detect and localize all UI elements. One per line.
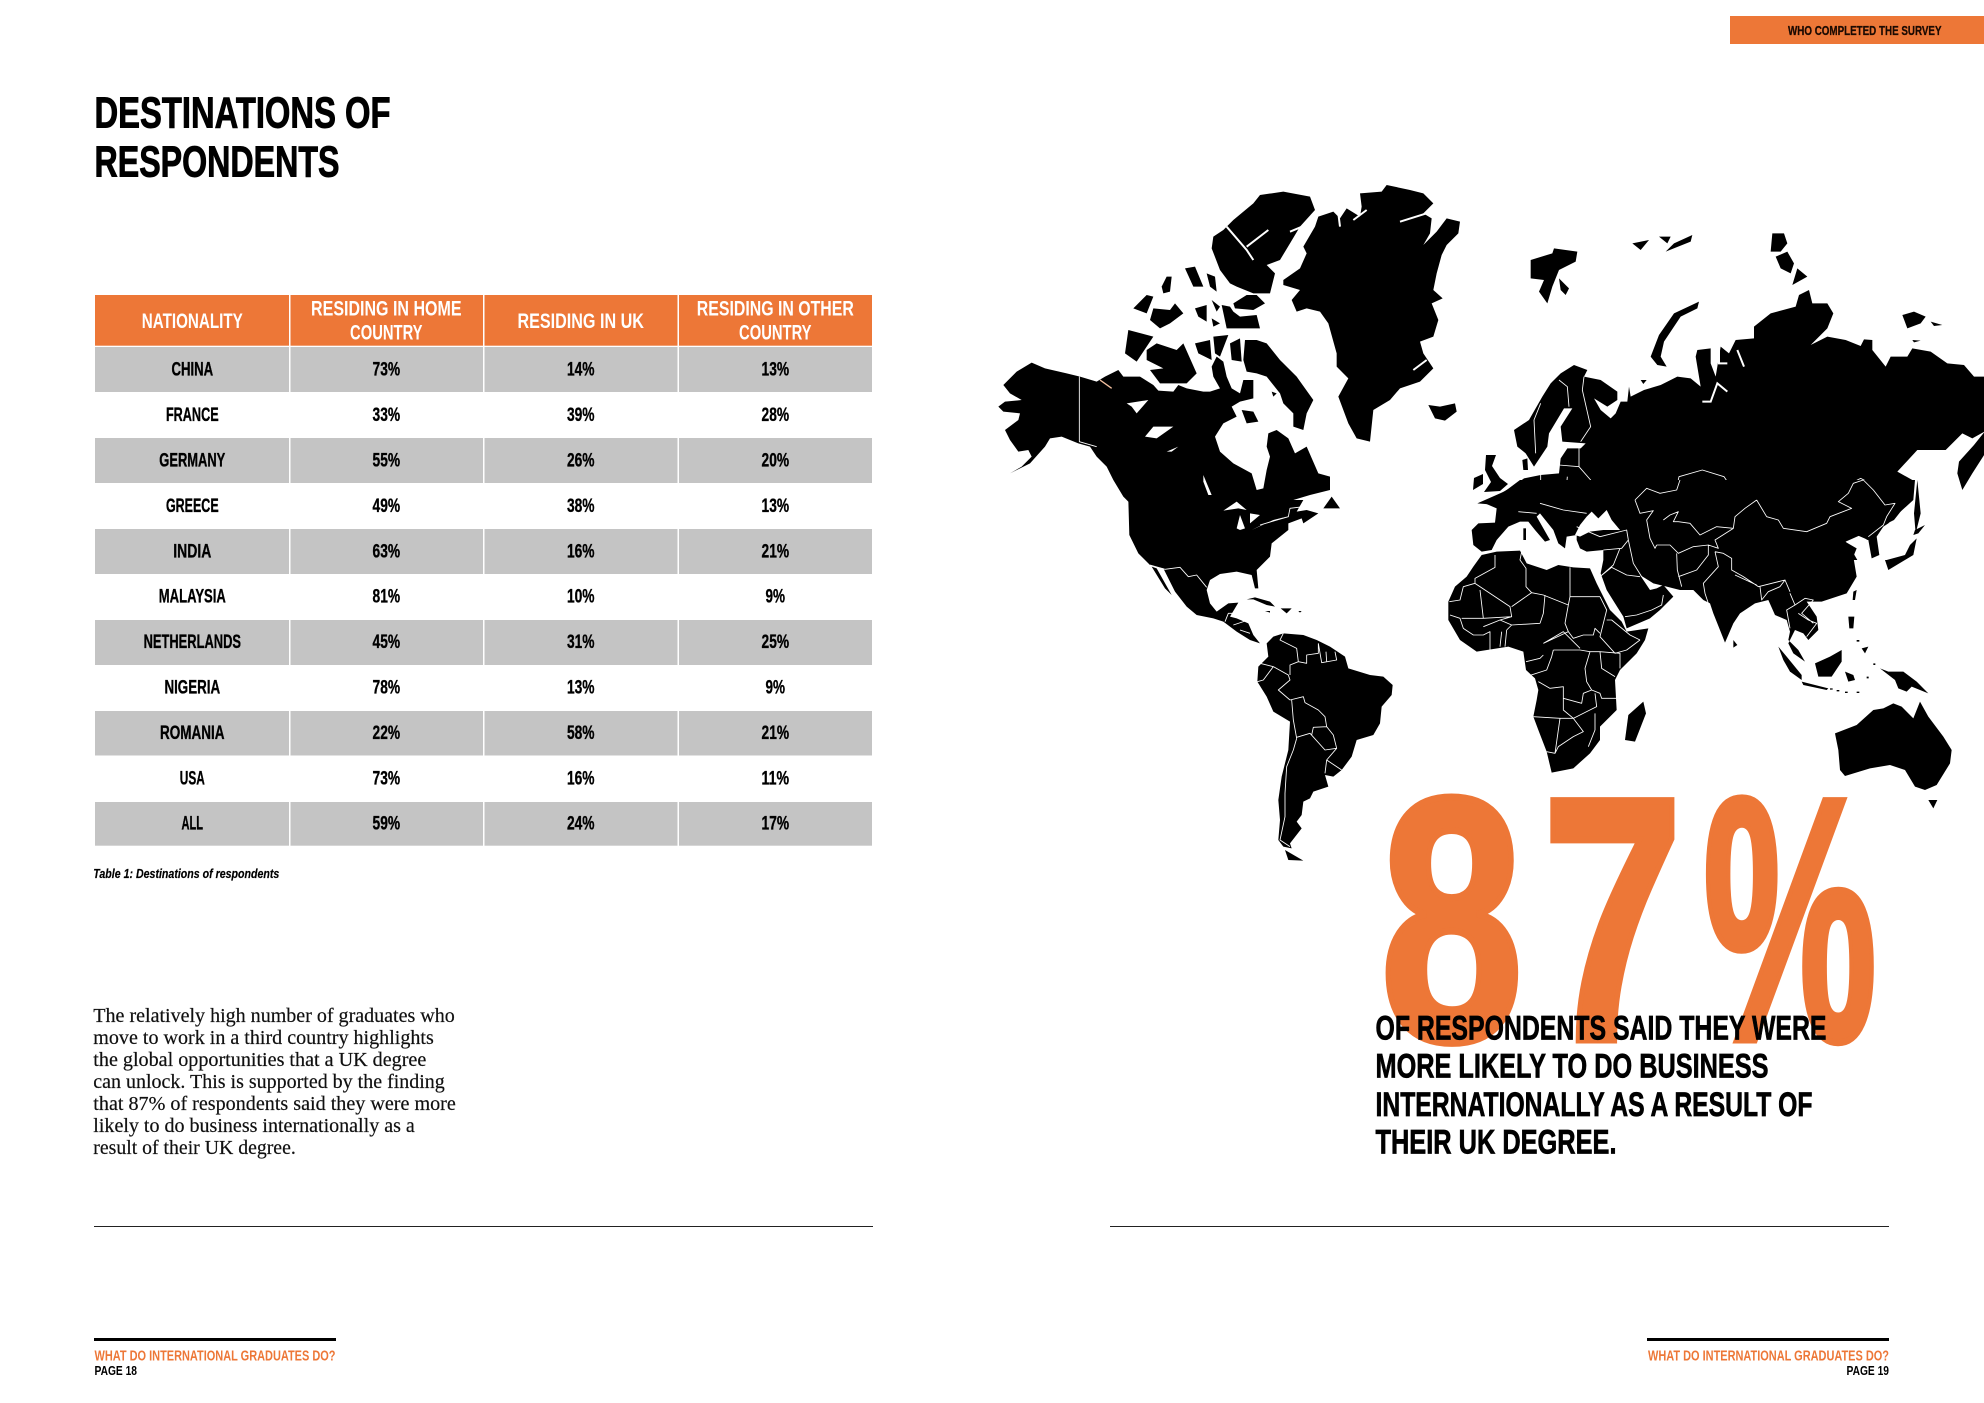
title: RESPONDENTS [94, 138, 340, 187]
body paragraph [93, 1005, 456, 1159]
body paragraph: likely to do business internationally as a [93, 1115, 415, 1137]
big number: 87%: 7 [1542, 725, 1683, 1114]
map: northern Eurasia and Arctic islands [1477, 233, 1984, 560]
title: DESTINATIONS OF [94, 88, 390, 137]
row: USA: 73% [373, 768, 400, 789]
statement overlay: OF RESPONDENTS SAID THEY WERE [1376, 1009, 1826, 1047]
row: France [166, 405, 789, 426]
table caption: Table 1: Destinations of respondents [93, 867, 279, 881]
map: Britain and Ireland [1473, 455, 1508, 492]
row: Nigeria: 78% [373, 678, 400, 698]
body paragraph: result of their UK degree. [93, 1137, 296, 1159]
row: Malaysia [159, 587, 785, 608]
footer: page 18 [94, 1338, 336, 1378]
row: Malaysia: 81% [373, 587, 400, 608]
row: Greece: 49% [373, 496, 400, 517]
row: China: CHINA [171, 360, 213, 381]
row: China: 14% [567, 360, 595, 381]
row: All: ALL [182, 814, 203, 835]
table header row: RESIDING IN HOME [311, 298, 462, 321]
row: France: FRANCE [166, 405, 219, 426]
row: Germany: GERMANY [159, 450, 226, 472]
row: Malaysia: 10% [567, 587, 595, 608]
row: India [95, 529, 872, 574]
row: USA [180, 768, 789, 789]
row: USA: 16% [567, 768, 595, 789]
row: Romania: 58% [567, 723, 595, 744]
row: China: 13% [762, 360, 789, 381]
row: Nigeria [164, 678, 785, 698]
map: Africa, southern Eurasia, Australia [1448, 480, 1952, 808]
row: All: 24% [567, 814, 595, 835]
statement overlay: MORE LIKELY TO DO BUSINESS [1376, 1047, 1768, 1085]
row: Netherlands: NETHERLANDS [144, 632, 241, 653]
row: China: 73% [373, 360, 400, 381]
row: Romania [95, 711, 872, 756]
row: Nigeria: NIGERIA [164, 678, 220, 698]
row: Germany: 26% [567, 450, 595, 472]
row: India: 21% [762, 541, 789, 562]
row: Romania: 22% [373, 723, 400, 744]
row: Malaysia: MALAYSIA [159, 587, 226, 608]
footer: page 19: WHAT DO INTERNATIONAL GRADUATES DO? [1648, 1349, 1889, 1365]
body paragraph: can unlock. This is supported by the finding [93, 1071, 445, 1093]
row: Malaysia: 9% [766, 587, 785, 608]
row: Greece: 13% [762, 496, 789, 517]
row: France: 39% [567, 405, 595, 426]
tab: section label [1730, 16, 1984, 44]
row: France: 28% [762, 405, 789, 426]
row: Germany: 55% [373, 450, 400, 472]
table header row [95, 295, 872, 346]
row: Nigeria: 9% [766, 678, 785, 698]
row: Greece: GREECE [166, 496, 219, 517]
row: Nigeria: 13% [567, 678, 595, 698]
footer: page 19 [1647, 1338, 1889, 1378]
statement overlay: INTERNATIONALLY AS A RESULT OF [1376, 1086, 1812, 1124]
row: India: INDIA [173, 541, 211, 562]
big number: 87%: 8 [1380, 725, 1524, 1114]
row: France: 33% [373, 405, 400, 426]
row: India: 16% [567, 541, 595, 562]
row: Netherlands [95, 620, 872, 665]
footer: page 19: PAGE 19 [1846, 1364, 1889, 1378]
row: All: 59% [373, 814, 400, 835]
big number: 87% [1380, 725, 1877, 1114]
row: Netherlands: 45% [373, 632, 400, 653]
row: USA: USA [180, 768, 205, 789]
map: USA, Central and South America [1128, 500, 1393, 861]
table header row: RESIDING IN OTHER [697, 298, 854, 321]
row: China [95, 347, 872, 392]
row: All: 17% [762, 814, 789, 835]
statement overlay [1376, 1009, 1826, 1161]
row: Greece: 38% [567, 496, 595, 517]
footer: page 18: WHAT DO INTERNATIONAL GRADUATES DO? [94, 1349, 336, 1365]
footer: page 18: PAGE 18 [94, 1364, 137, 1378]
row: Greece [166, 496, 789, 517]
row: Germany: 20% [762, 450, 789, 472]
table header row: RESIDING IN UK [517, 310, 644, 333]
body paragraph: that 87% of respondents said they were more [93, 1093, 456, 1115]
body paragraph: move to work in a third country highlights [93, 1027, 434, 1049]
row: Romania: ROMANIA [160, 723, 225, 744]
row: Germany [95, 438, 872, 483]
statement overlay: THEIR UK DEGREE. [1376, 1123, 1616, 1161]
row: Romania: 21% [762, 723, 789, 744]
row: All [95, 802, 872, 846]
row: USA: 11% [762, 768, 789, 789]
row: Netherlands: 31% [567, 632, 595, 653]
table header row: COUNTRY [350, 321, 423, 344]
table header row: COUNTRY [739, 321, 812, 344]
table: destinations of respondents [95, 295, 872, 846]
table header row: NATIONALITY [142, 310, 243, 333]
map: Canada, Alaska, Greenland and Arctic islands [998, 185, 1460, 520]
world map [998, 185, 1984, 861]
body paragraph: The relatively high number of graduates who [93, 1005, 455, 1027]
row: Netherlands: 25% [762, 632, 789, 653]
body paragraph: the global opportunities that a UK degree [93, 1049, 426, 1071]
row: India: 63% [373, 541, 400, 562]
title [94, 88, 390, 187]
